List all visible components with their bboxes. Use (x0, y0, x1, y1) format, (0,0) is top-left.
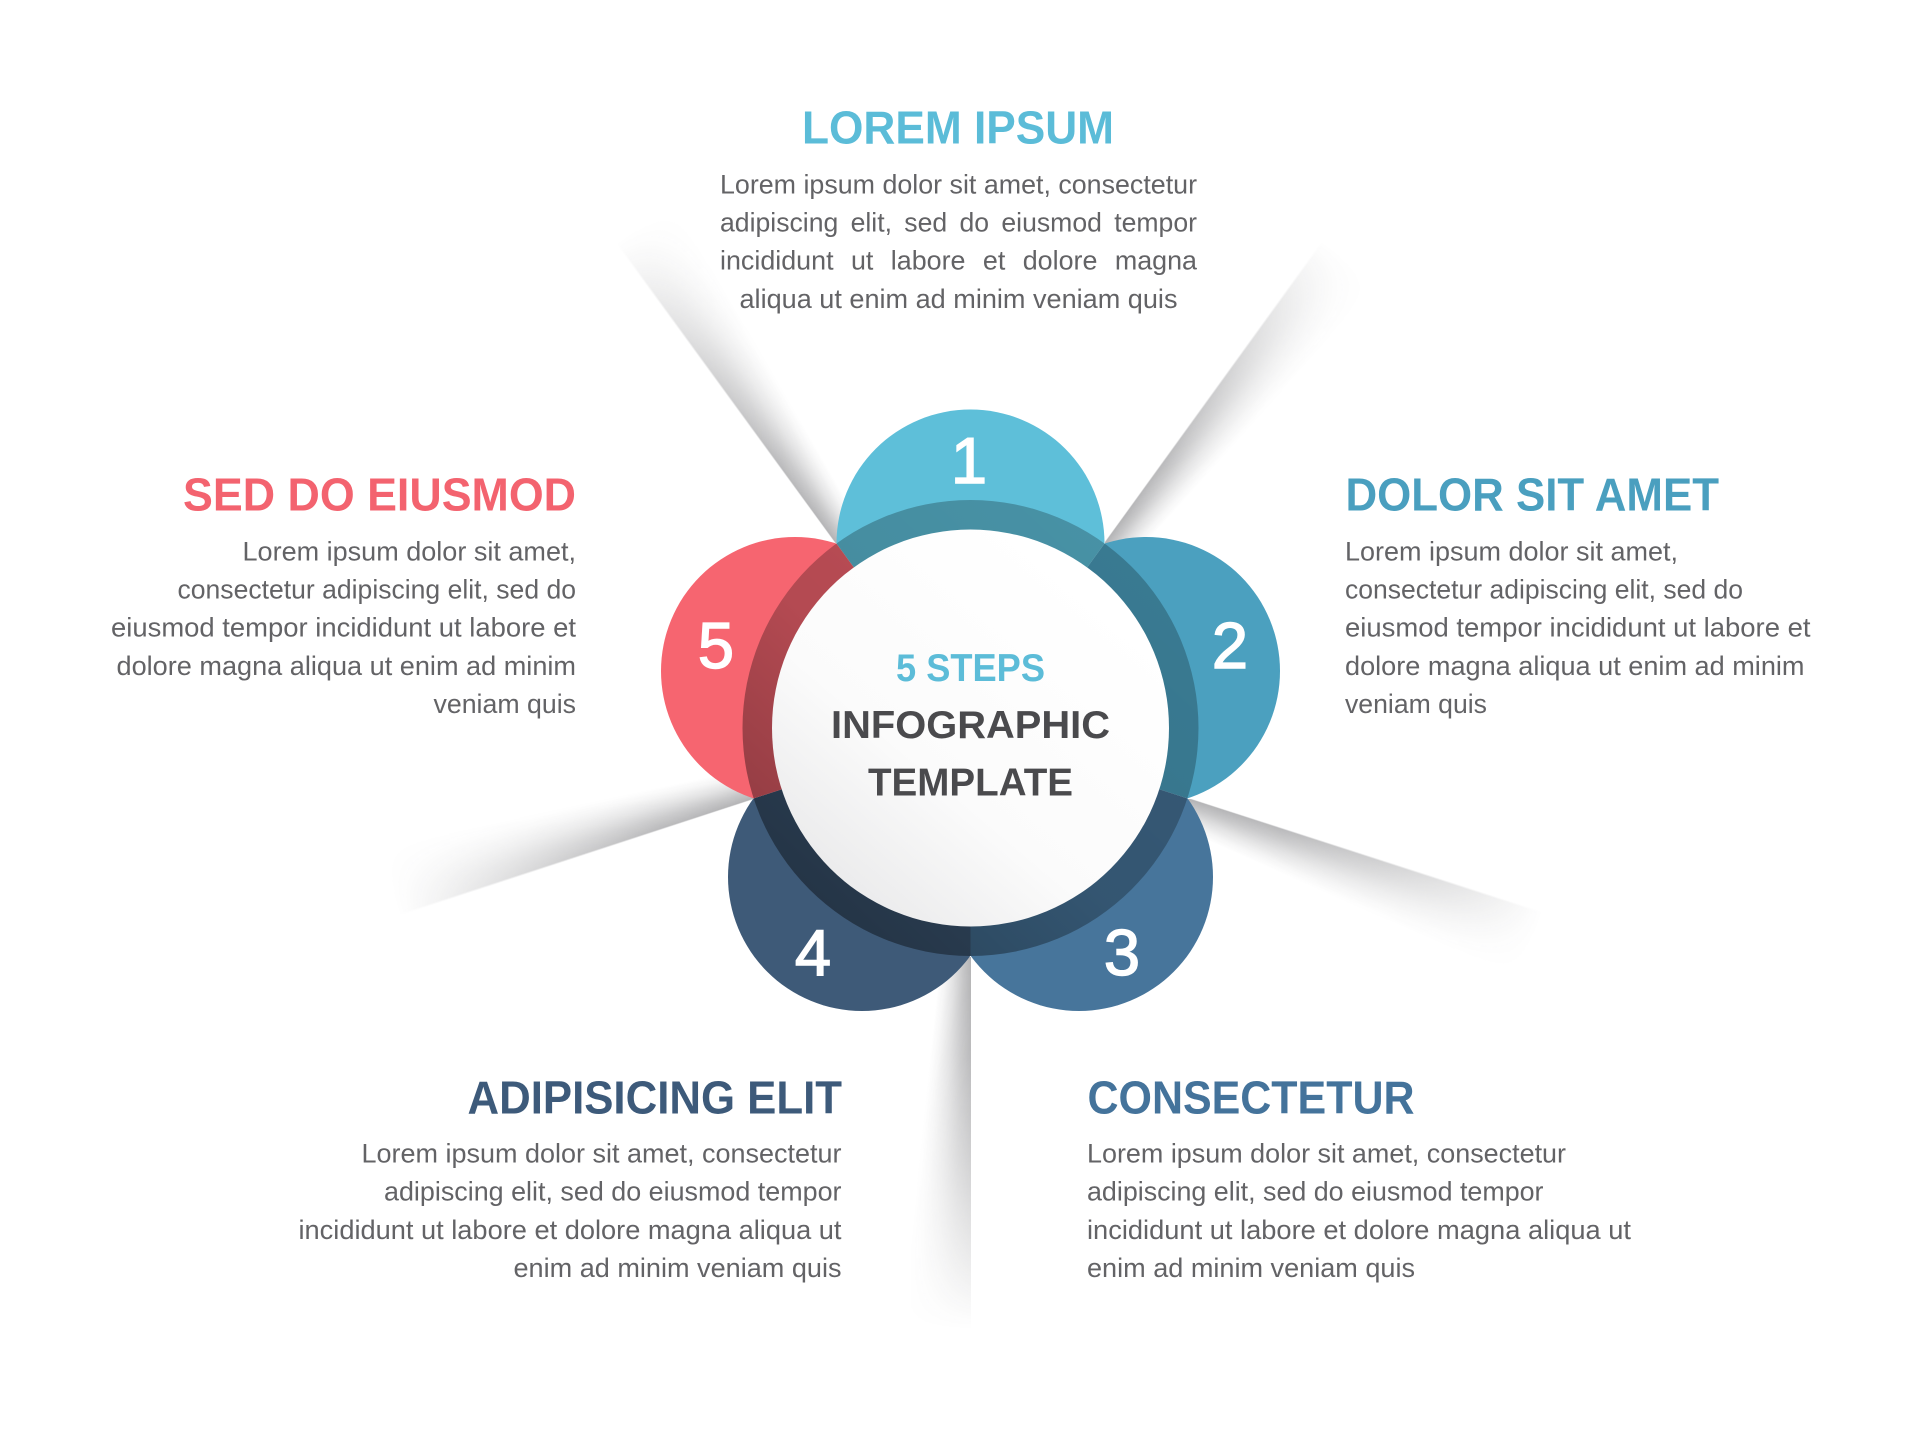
paragraph: dolor sit amet: veniam quis (1345, 689, 1487, 719)
fold shadow: between sectors 5 and 1 (635, 264, 842, 543)
paragraph: lorem ipsum (720, 170, 1198, 314)
paragraph: dolor sit amet (1345, 536, 1811, 719)
paragraph: adipisicing elit: Lorem ipsum dolor sit amet, consectetur (362, 1138, 842, 1168)
text block: adipisicing elit (298, 1071, 842, 1283)
heading: sed do eiusmod: SED DO EIUSMOD (183, 469, 576, 521)
petal 4 (728, 789, 970, 1011)
fold shadow: between sectors 3 and 4 (931, 957, 971, 1300)
paragraph: adipisicing elit (298, 1138, 842, 1283)
paragraph: sed do eiusmod: veniam quis (434, 689, 576, 719)
paragraph: lorem ipsum: incididunt ut labore et dolore magna (720, 246, 1198, 276)
paragraph: sed do eiusmod: consectetur adipiscing elit, sed do (178, 574, 576, 604)
center title: template: TEMPLATE (868, 762, 1073, 804)
paragraph: sed do eiusmod (111, 536, 577, 719)
center title: infographic: INFOGRAPHIC (831, 704, 1110, 747)
paragraph: consectetur: enim ad minim veniam quis (1087, 1253, 1415, 1283)
paragraph: dolor sit amet: eiusmod tempor incididunt ut labore et (1345, 612, 1811, 642)
paragraph: consectetur: incididunt ut labore et dolore magna aliqua ut (1087, 1215, 1631, 1245)
fold shadow: between sectors 2 and 3 (1188, 799, 1514, 922)
paragraph: lorem ipsum: adipiscing elit, sed do eiusmod tempor (720, 208, 1197, 238)
number 1: 1 (951, 424, 987, 497)
petal 3 (970, 789, 1213, 1011)
paragraph: dolor sit amet: Lorem ipsum dolor sit amet, (1345, 536, 1678, 566)
petal 5 (661, 537, 854, 798)
heading: consectetur: CONSECTETUR (1088, 1071, 1414, 1123)
heading: adipisicing elit: ADIPISICING ELIT (468, 1071, 842, 1123)
heading: dolor sit amet: DOLOR SIT AMET (1346, 469, 1719, 521)
paragraph: sed do eiusmod: dolore magna aliqua ut enim ad minim (116, 651, 576, 681)
flower diagram (661, 410, 1280, 1011)
text block: consectetur (1087, 1071, 1631, 1283)
heading: lorem ipsum: LOREM IPSUM (802, 102, 1114, 154)
paragraph: lorem ipsum: Lorem ipsum dolor sit amet, consectetur (720, 170, 1197, 200)
fold shadow: between sectors 1 and 2 (1105, 266, 1314, 544)
number 2: 2 (1212, 609, 1248, 682)
paragraph: dolor sit amet: dolore magna aliqua ut enim ad minim (1345, 651, 1804, 681)
paragraph: consectetur (1087, 1138, 1631, 1283)
text block: sed do eiusmod (111, 469, 577, 719)
fold shadow: between sectors 4 and 5 (427, 780, 753, 904)
paragraph: consectetur: adipiscing elit, sed do eiusmod tempor (1087, 1176, 1544, 1206)
paragraph: sed do eiusmod: Lorem ipsum dolor sit amet, (242, 536, 576, 566)
paragraph: dolor sit amet: consectetur adipiscing elit, sed do (1345, 574, 1743, 604)
number 5: 5 (698, 609, 734, 682)
center disc (772, 530, 1169, 926)
text block: lorem ipsum (720, 102, 1198, 314)
number 3: 3 (1104, 916, 1140, 989)
paragraph: adipisicing elit: incididunt ut labore et dolore magna aliqua ut (298, 1215, 842, 1245)
text block: dolor sit amet (1345, 469, 1811, 719)
center title: 5 steps: 5 STEPS (896, 647, 1045, 690)
paragraph: adipisicing elit: adipiscing elit, sed do eiusmod tempor (384, 1176, 842, 1206)
petal 2 (1087, 537, 1280, 798)
paragraph: sed do eiusmod: eiusmod tempor incididunt ut labore et (111, 612, 577, 642)
paragraph: consectetur: Lorem ipsum dolor sit amet, consectetur (1087, 1138, 1566, 1168)
number 4: 4 (795, 916, 831, 989)
petal 1 (836, 410, 1104, 568)
paragraph: adipisicing elit: enim ad minim veniam quis (514, 1253, 842, 1283)
paragraph: lorem ipsum: aliqua ut enim ad minim veniam quis (740, 284, 1178, 314)
